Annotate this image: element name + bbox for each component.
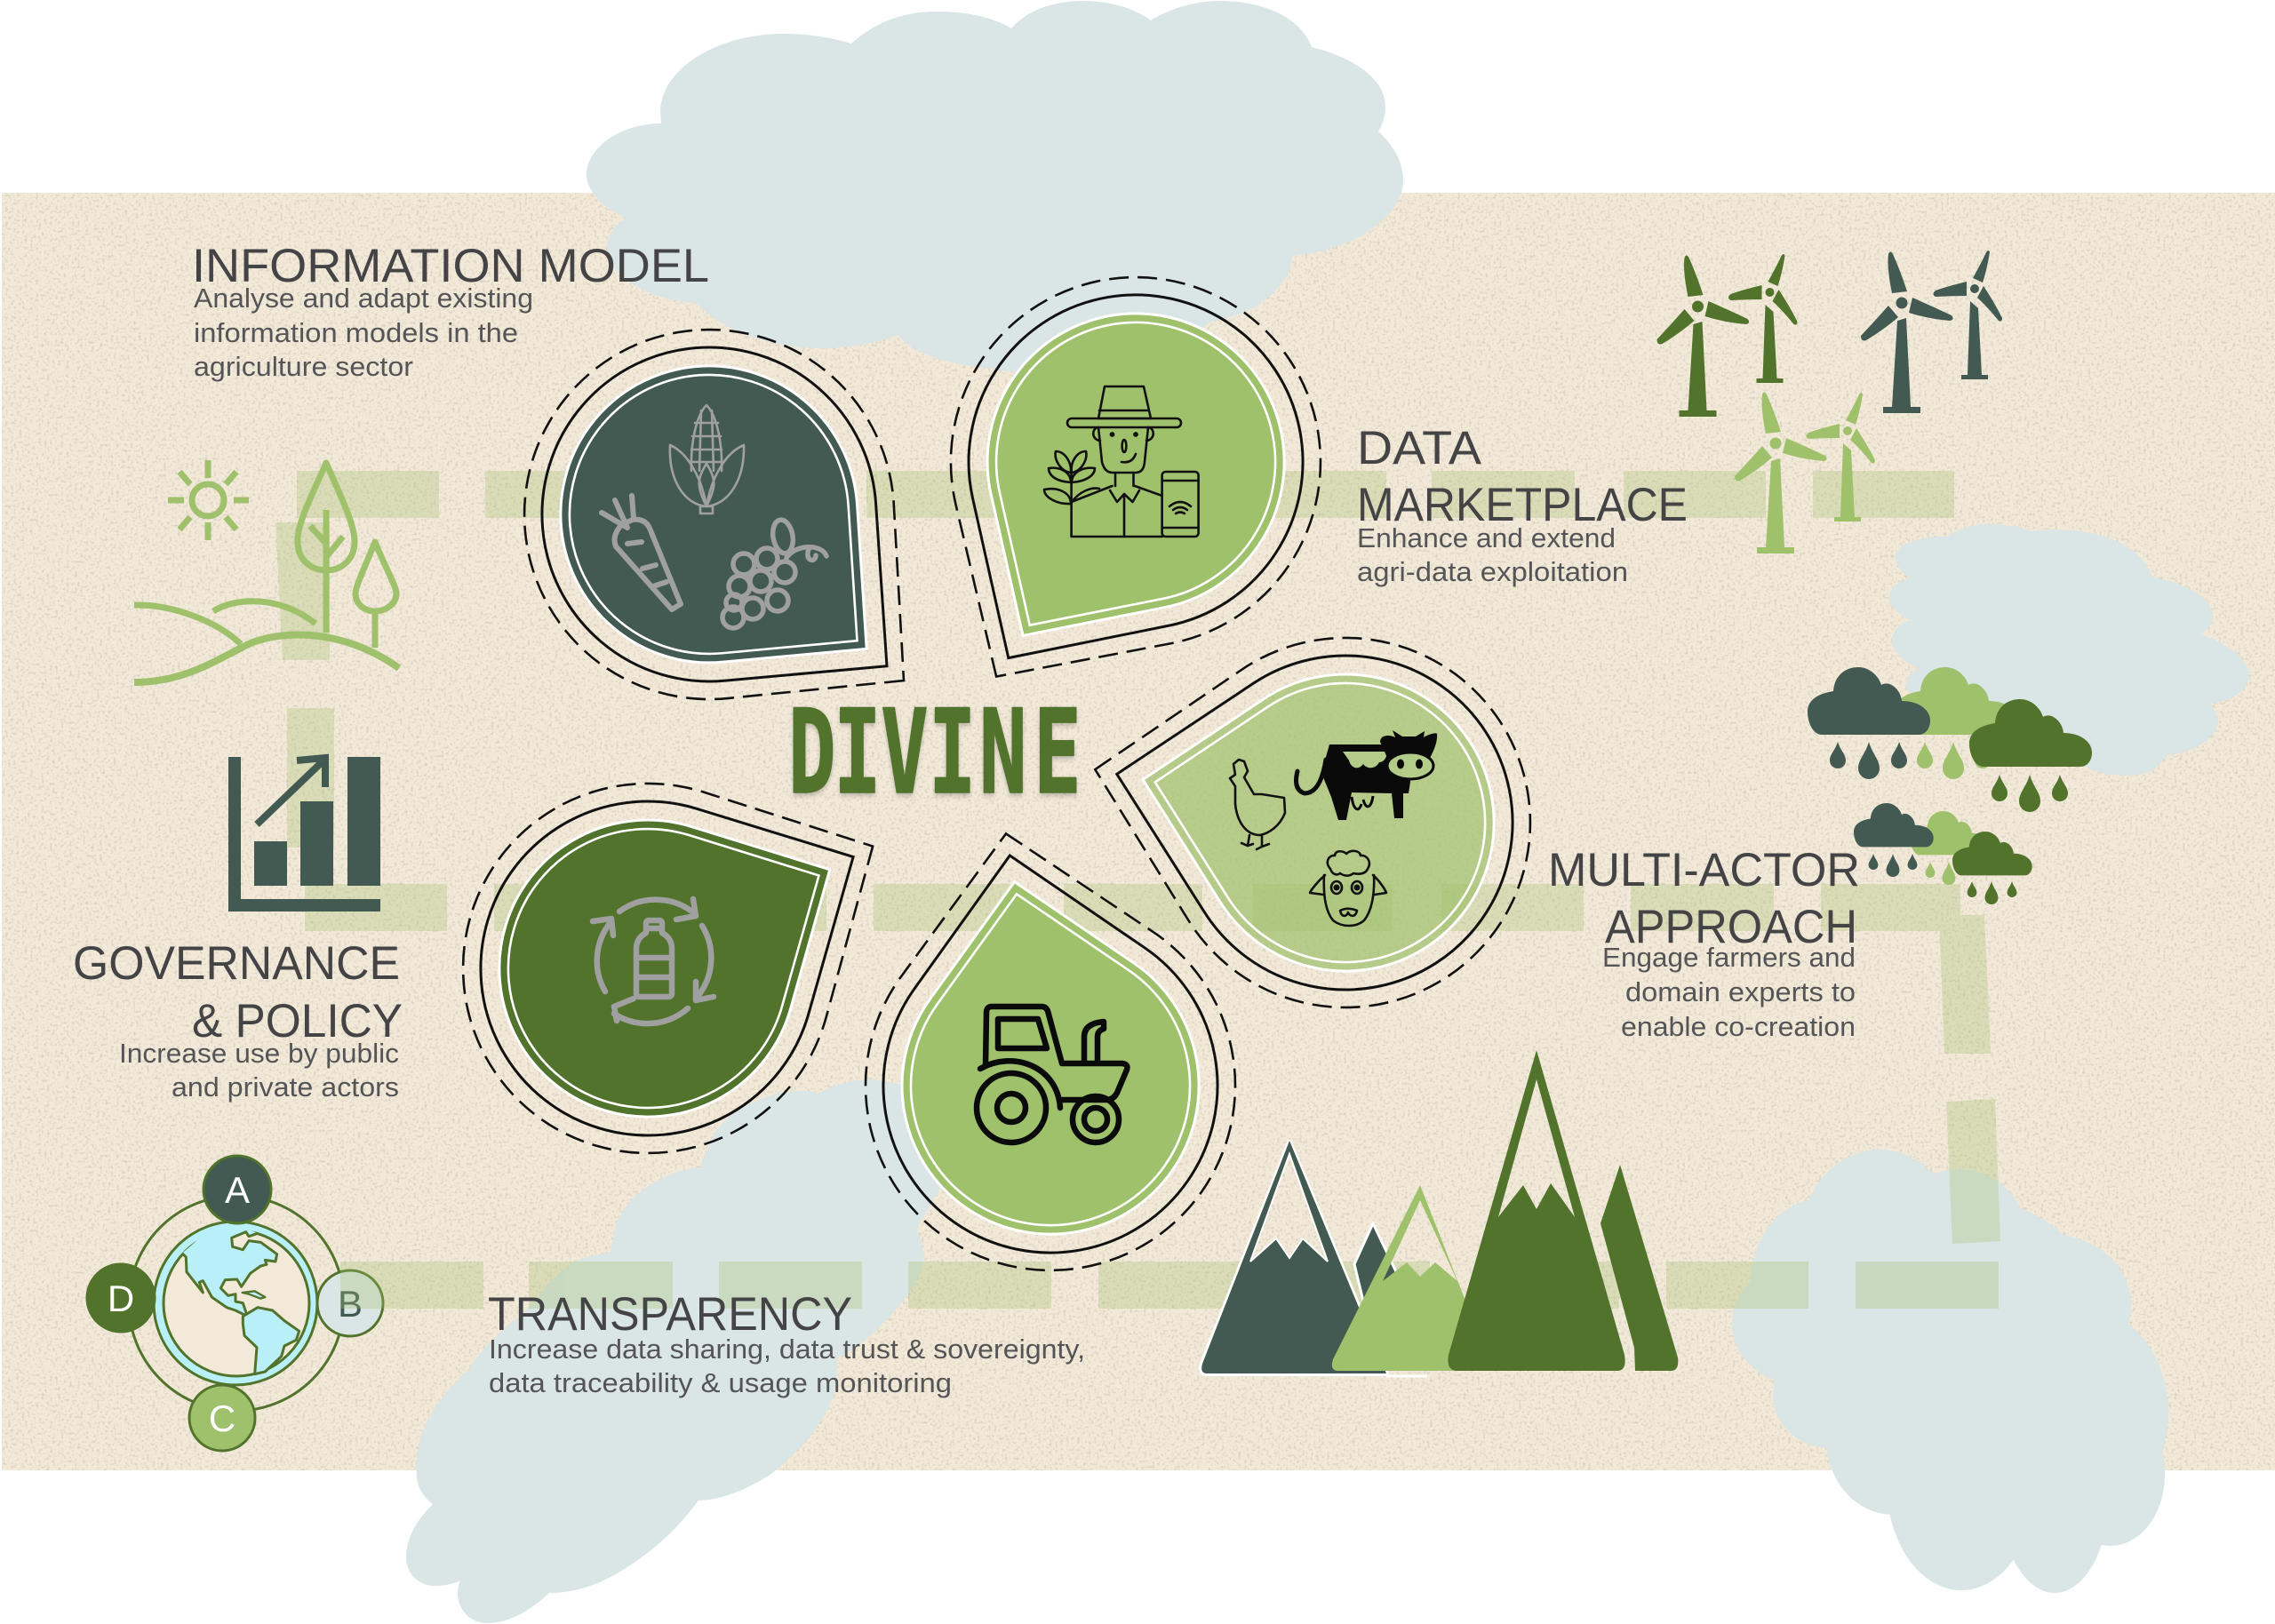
icon: chicken: [1230, 760, 1285, 849]
icon: wind turbines: [1656, 251, 2002, 553]
cloud: bottom right: [1732, 1150, 2168, 1593]
heading and text: information model: information models in the: [194, 317, 518, 348]
icon: globe with A B C D badges: C: [209, 1397, 235, 1439]
icon: sheep: [1310, 851, 1386, 926]
heading and text: governance and policy: and private actors: [172, 1071, 399, 1103]
heading and text: multi-actor approach: domain experts to: [1625, 976, 1856, 1007]
icon: globe with A B C D badges: D: [108, 1278, 134, 1319]
heading and text: multi-actor approach: MULTI-ACTOR: [1548, 844, 1860, 896]
heading and text: information model: Analyse and adapt existing: [194, 283, 533, 314]
icon: mountains: [1201, 1050, 1678, 1376]
heading and text: multi-actor approach: APPROACH: [1605, 901, 1857, 953]
dashed path bands: [275, 471, 2000, 1309]
heading and text: transparency: Increase data sharing, data trust & sovereignty,: [489, 1333, 1085, 1365]
icon: globe with A B C D badges: A: [225, 1169, 250, 1211]
panel: governance drop: [397, 684, 961, 1219]
heading and text: information model: agriculture sector: [194, 351, 413, 382]
icon: rain clouds: [1808, 667, 2092, 904]
icon: farmer with plant and phone: [1044, 386, 1199, 537]
heading and text: multi-actor approach: Engage farmers and: [1602, 942, 1856, 973]
heading and text: information model: INFORMATION MODEL: [192, 240, 709, 292]
title: DIVINE: [788, 686, 1082, 821]
heading and text: governance and policy: GOVERNANCE: [73, 937, 400, 990]
heading and text: transparency: data traceability & usage monitoring: [489, 1367, 952, 1398]
icon: carrot: [602, 496, 681, 609]
icon: bar chart with arrow: [228, 757, 380, 912]
panel: information model drop: [449, 254, 1024, 821]
heading and text: governance and policy: Increase use by public: [119, 1038, 399, 1069]
heading and text: governance and policy: [73, 937, 403, 1103]
panel: tractor drop: [824, 801, 1265, 1300]
icon: sun, trees and hills: [134, 460, 399, 682]
heading and text: data marketplace: Enhance and extend: [1357, 522, 1616, 553]
heading and text: data marketplace: [1357, 422, 1688, 587]
heading and text: data marketplace: agri-data exploitation: [1357, 556, 1628, 587]
heading and text: data marketplace: MARKETPLACE: [1357, 479, 1688, 531]
panel: multi-actor drop: [1057, 589, 1565, 1042]
icon: recycled bottle: [593, 899, 714, 1023]
icon: globe with A B C D badges: B: [338, 1283, 363, 1325]
heading and text: transparency: TRANSPARENCY: [488, 1288, 852, 1341]
cloud: bottom left: [406, 1079, 960, 1623]
icon: tractor: [977, 1007, 1127, 1142]
panel: data marketplace drop: [842, 206, 1392, 777]
heading and text: information model: [192, 240, 709, 382]
heading and text: multi-actor approach: enable co-creation: [1621, 1011, 1856, 1042]
icon: globe with A B C D badges: [87, 1156, 383, 1451]
heading and text: multi-actor approach: [1548, 844, 1860, 1042]
cloud: right: [1889, 524, 2249, 776]
icon: cow: [1297, 730, 1437, 820]
heading and text: transparency: [488, 1288, 1085, 1398]
heading and text: governance and policy: & POLICY: [192, 995, 403, 1047]
icon: corn: [670, 405, 744, 513]
cloud: top: [587, 1, 1403, 373]
heading and text: data marketplace: DATA: [1357, 422, 1482, 474]
icon: grapes: [722, 518, 826, 628]
textured beige background: [2, 193, 2275, 1470]
